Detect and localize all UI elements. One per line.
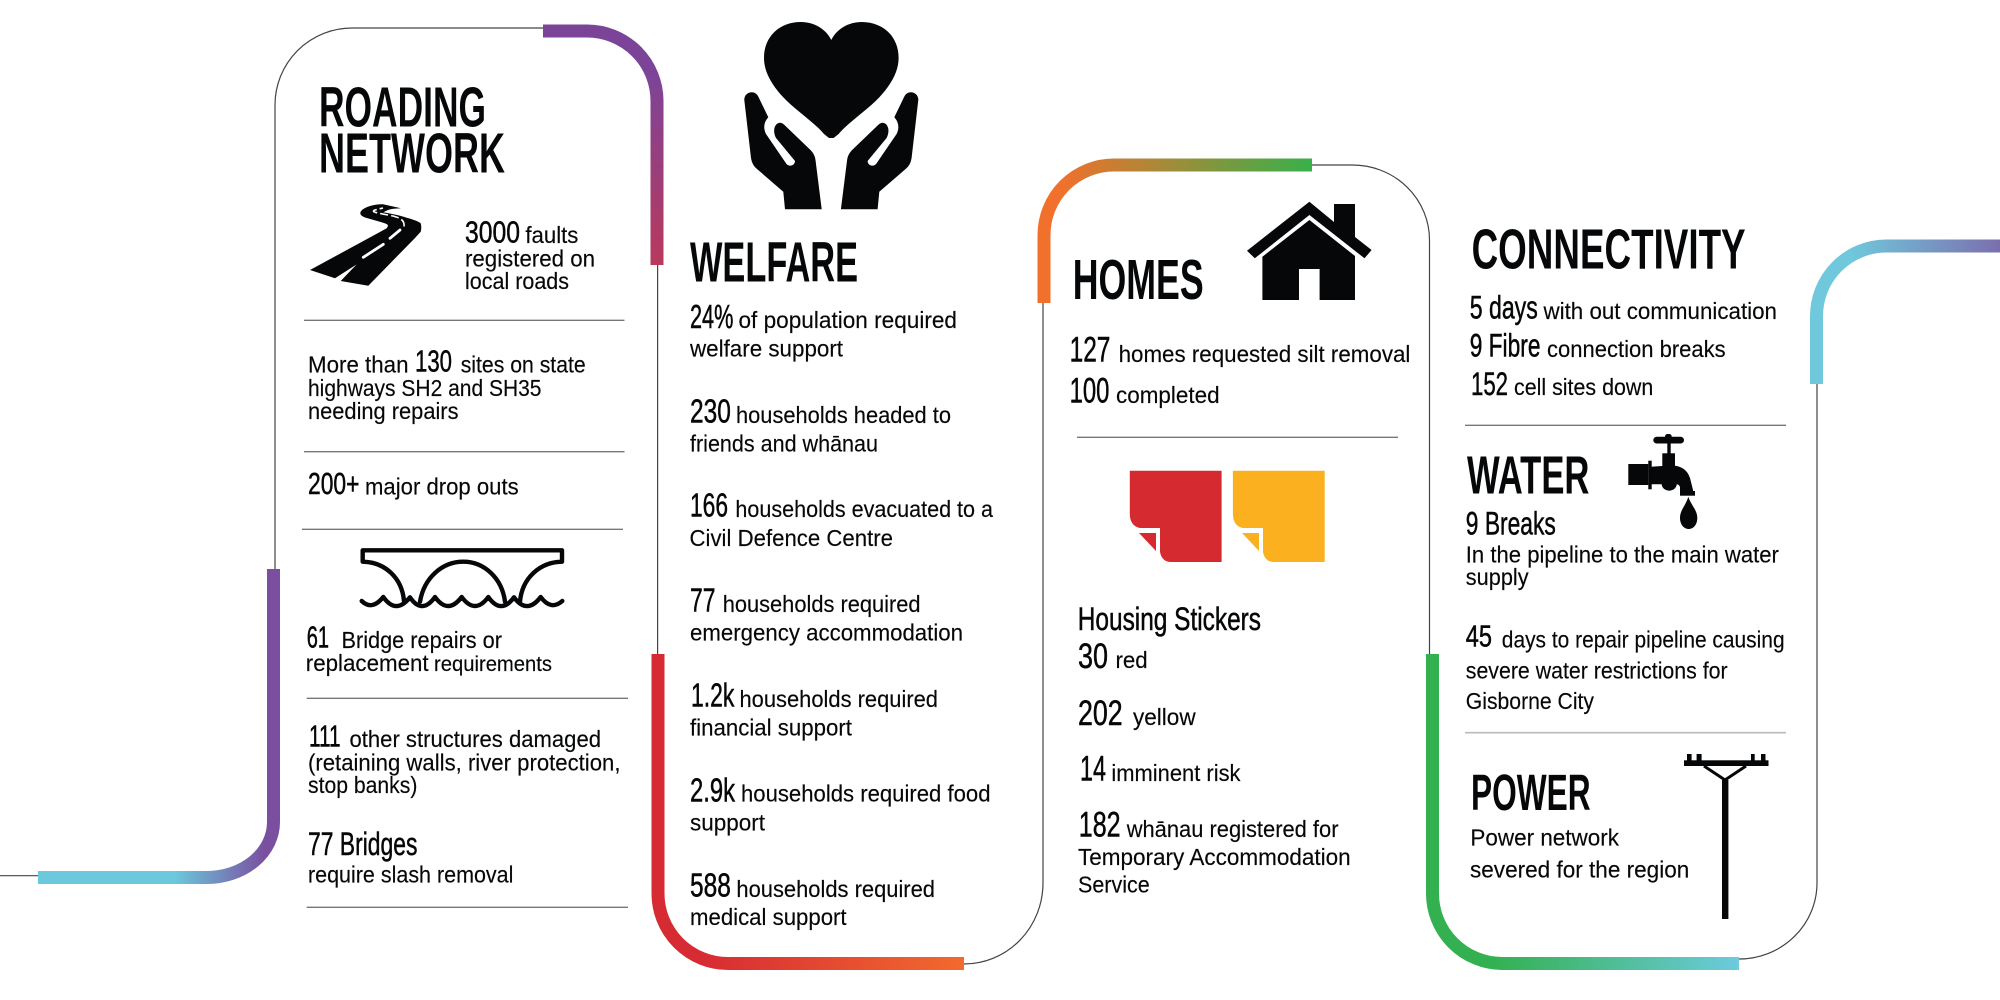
stat: 2.9k households food support: 2.9k xyxy=(690,771,735,808)
heading: roading network: ROADING xyxy=(319,76,486,140)
stat: 100 completed: 100 xyxy=(1070,372,1109,411)
stat: 111 other structures damaged: (retaining walls, river protection, xyxy=(308,750,620,776)
icon: winding road xyxy=(310,204,421,286)
stat: 5 days with out communication: with out communication xyxy=(1543,298,1777,324)
stat: 200+ major drop outs: 200+ xyxy=(308,466,359,501)
text: power network severed: Power network xyxy=(1470,825,1619,851)
stat: 45 days to repair pipeline: severe water restrictions for xyxy=(1466,657,1728,683)
stat: 182 whanau registered xyxy=(1078,806,1351,898)
stat: 77 households emergency accommodation xyxy=(690,582,963,646)
stat: 202 yellow xyxy=(1078,694,1196,733)
stat: 588 households medical support: medical support xyxy=(690,904,847,930)
heading: roading network xyxy=(319,76,505,186)
icon: hands holding heart xyxy=(744,22,918,209)
stat: 152 cell sites down: 152 xyxy=(1471,366,1508,402)
stat: 202 yellow: 202 xyxy=(1078,694,1123,733)
stat: 77 bridges require slash removal: require slash removal xyxy=(308,862,513,888)
stat: 61 bridge repairs: Bridge repairs or xyxy=(342,627,502,653)
stat: 111 other structures damaged: stop banks) xyxy=(308,772,417,798)
stat: 230 households to friends and whanau: households headed to xyxy=(736,402,951,428)
stat: housing stickers 30 red: 30 xyxy=(1078,637,1108,676)
stat: 61 bridge repairs: requirements xyxy=(434,653,552,676)
stat: 77 households emergency accommodation: emergency accommodation xyxy=(690,620,963,646)
text: power network severed: severed for the region xyxy=(1470,856,1689,882)
stat: 230 households to friends and whanau: 230 xyxy=(690,393,731,430)
panel: roading network xyxy=(302,76,628,907)
stat: 5 days with out communication xyxy=(1470,289,1777,325)
stat: 24% of population: welfare support xyxy=(689,336,844,362)
stat: 130 sites on state highways xyxy=(308,344,586,424)
stat: 200+ major drop outs xyxy=(308,466,519,501)
stat: 9 breaks in the pipeline: In the pipeline to the main water xyxy=(1466,542,1779,568)
stat: 588 households medical support: 588 xyxy=(690,867,731,904)
heading: welfare: WELFARE xyxy=(690,231,858,295)
stat: 588 households medical support: households required xyxy=(736,876,935,902)
stat: 3000 faults: faults xyxy=(525,222,578,248)
stat: 14 imminent risk xyxy=(1080,750,1241,789)
stat: 202 yellow: yellow xyxy=(1133,704,1196,730)
stat: 24% of population xyxy=(689,298,957,362)
stat: 3000 faults: local roads xyxy=(465,268,569,294)
stat: housing stickers 30 red: Housing Stickers xyxy=(1078,601,1261,637)
stat: 2.9k households food support xyxy=(690,771,990,836)
heading: connectivity: CONNECTIVITY xyxy=(1472,217,1746,281)
icon: house xyxy=(1247,202,1372,300)
panel: connectivity, water and power xyxy=(1465,217,1786,919)
stat: 1.2k households financial support xyxy=(690,677,938,740)
icon: red housing sticker xyxy=(1130,471,1222,562)
stat: 130 sites on state highways: needing repairs xyxy=(308,398,458,424)
stat: 182 whanau registered: whānau registered for xyxy=(1126,816,1339,842)
heading: water: WATER xyxy=(1467,445,1589,505)
stat: 45 days to repair pipeline: days to repair pipeline causing xyxy=(1502,627,1785,653)
text: power network severed xyxy=(1470,825,1689,882)
stat: 127 homes requested silt removal: 127 xyxy=(1070,331,1110,370)
stat: housing stickers 30 red: red xyxy=(1116,647,1148,673)
stat: 45 days to repair pipeline xyxy=(1466,619,1785,714)
stat: 130 sites on state highways: highways SH2 and SH35 xyxy=(308,375,542,401)
stat: 2.9k households food support: households required food xyxy=(741,781,990,807)
stat: 9 fibre connection breaks: connection breaks xyxy=(1547,336,1726,362)
heading: roading network: NETWORK xyxy=(319,122,505,186)
stat: 24% of population: 24% xyxy=(690,298,733,335)
stat: 111 other structures damaged xyxy=(308,719,620,798)
stat: 130 sites on state highways: sites on state xyxy=(461,352,586,378)
stat: 1.2k households financial support: households required xyxy=(740,686,938,712)
stat: 182 whanau registered: Service xyxy=(1078,872,1150,898)
icon: yellow housing sticker xyxy=(1233,471,1325,562)
stat: 3000 faults: 3000 xyxy=(465,215,520,250)
stat: 1.2k households financial support: financial support xyxy=(690,714,853,740)
stat: 5 days with out communication: 5 days xyxy=(1470,289,1538,325)
stat: 9 fibre connection breaks xyxy=(1470,328,1726,364)
stat: 130 sites on state highways: 130 xyxy=(415,344,452,379)
stat: 3000 faults: registered on xyxy=(465,246,595,272)
stat: 200+ major drop outs: major drop outs xyxy=(365,474,519,500)
stat: 111 other structures damaged: 111 xyxy=(309,719,341,754)
heading: power: POWER xyxy=(1471,764,1591,821)
stat: 14 imminent risk: 14 xyxy=(1080,750,1106,789)
stat: 182 whanau registered: 182 xyxy=(1079,806,1121,845)
stat: 166 households evacuated: households evacuated to a xyxy=(735,496,993,522)
stat: 182 whanau registered: Temporary Accommodation xyxy=(1078,844,1351,870)
stat: 9 fibre connection breaks: 9 Fibre xyxy=(1470,328,1540,364)
stat: 588 households medical support xyxy=(690,867,935,930)
stat: 152 cell sites down: cell sites down xyxy=(1514,374,1653,400)
stat: 61 bridge repairs: replacement xyxy=(306,650,429,676)
stat: 2.9k households food support: support xyxy=(690,810,766,836)
stat: 230 households to friends and whanau xyxy=(690,393,951,457)
stat: 166 households evacuated: 166 xyxy=(690,487,728,524)
panel: homes xyxy=(1070,202,1410,898)
stat: 166 households evacuated xyxy=(690,487,993,551)
stat: 24% of population: of population required xyxy=(738,307,957,333)
stat: 100 completed: completed xyxy=(1116,382,1220,408)
icon: bridge over water xyxy=(362,550,562,606)
stat: 9 breaks in the pipeline: 9 Breaks xyxy=(1466,505,1556,541)
stat: 77 bridges require slash removal: 77 Bridges xyxy=(308,826,417,862)
stat: 152 cell sites down xyxy=(1471,366,1653,402)
stat: 130 sites on state highways: More than xyxy=(308,352,408,378)
icon: dripping tap xyxy=(1628,434,1697,529)
stat: 77 households emergency accommodation: 77 xyxy=(690,582,716,619)
stat: 45 days to repair pipeline: Gisborne City xyxy=(1466,688,1594,714)
stat: 9 breaks in the pipeline xyxy=(1466,505,1779,590)
stat: 100 completed xyxy=(1070,372,1220,411)
stat: 77 households emergency accommodation: households required xyxy=(723,591,921,617)
stat: 61 bridge repairs: 61 xyxy=(307,620,329,655)
stat: 127 homes requested silt removal: homes requested silt removal xyxy=(1119,341,1410,367)
stat: 111 other structures damaged: other structures damaged xyxy=(350,726,601,752)
stat: 127 homes requested silt removal xyxy=(1070,331,1410,370)
stat: 166 households evacuated: Civil Defence Centre xyxy=(690,525,893,551)
icon: power pole xyxy=(1684,754,1768,919)
stat: 3000 faults xyxy=(465,215,595,294)
stat: housing stickers 30 red xyxy=(1078,601,1261,676)
stat: 1.2k households financial support: 1.2k xyxy=(691,677,735,714)
stat: 14 imminent risk: imminent risk xyxy=(1111,760,1241,786)
stat: 45 days to repair pipeline: 45 xyxy=(1466,619,1492,654)
stat: 9 breaks in the pipeline: supply xyxy=(1466,564,1529,590)
heading: homes: HOMES xyxy=(1073,248,1204,312)
stat: 61 bridge repairs xyxy=(306,620,552,676)
panel: welfare xyxy=(689,22,993,930)
stat: 77 bridges require slash removal xyxy=(308,826,513,888)
stat: 230 households to friends and whanau: friends and whānau xyxy=(690,431,878,457)
